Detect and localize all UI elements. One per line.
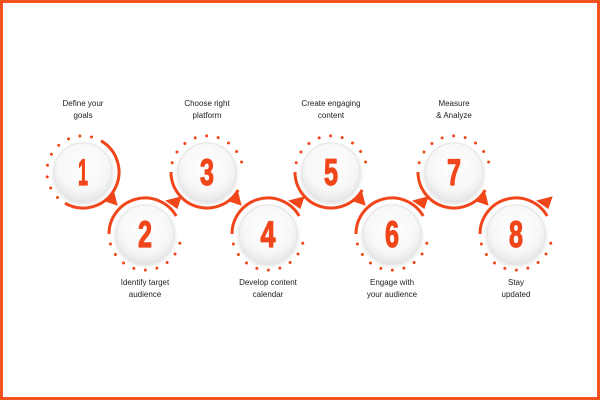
step 7: 7 — [447, 152, 461, 193]
step 7 — [418, 99, 489, 208]
step 8: 8 — [509, 214, 523, 255]
step 2 — [109, 196, 182, 299]
step 6 — [356, 196, 429, 299]
step 3: platform — [193, 111, 222, 120]
step 1 — [47, 99, 119, 208]
step 8: Stay — [508, 278, 524, 287]
step 8: updated — [502, 290, 530, 299]
step 5: content — [318, 111, 345, 120]
step 4: Develop content — [239, 278, 298, 287]
step 6: Engage with — [370, 278, 414, 287]
step 4: 4 — [260, 214, 276, 255]
step 2: Identify target — [121, 278, 170, 287]
step 2: audience — [129, 290, 162, 299]
step 5 — [295, 99, 366, 208]
step 1: goals — [73, 111, 93, 120]
step 1: 1 — [78, 152, 88, 193]
step 7: & Analyze — [436, 111, 472, 120]
step 6: your audience — [367, 290, 418, 299]
step 3: 3 — [200, 152, 214, 193]
step 3 — [171, 99, 242, 208]
step 8 — [480, 196, 553, 299]
step 1: Define your — [63, 99, 104, 108]
step 7: Measure — [438, 99, 470, 108]
step 4: calendar — [253, 290, 284, 299]
step 5: Create engaging — [301, 99, 361, 108]
step 4 — [232, 196, 305, 299]
step 2: 2 — [138, 214, 152, 255]
step 3: Choose right — [184, 99, 230, 108]
step 6: 6 — [385, 214, 399, 255]
step 5: 5 — [324, 152, 338, 193]
